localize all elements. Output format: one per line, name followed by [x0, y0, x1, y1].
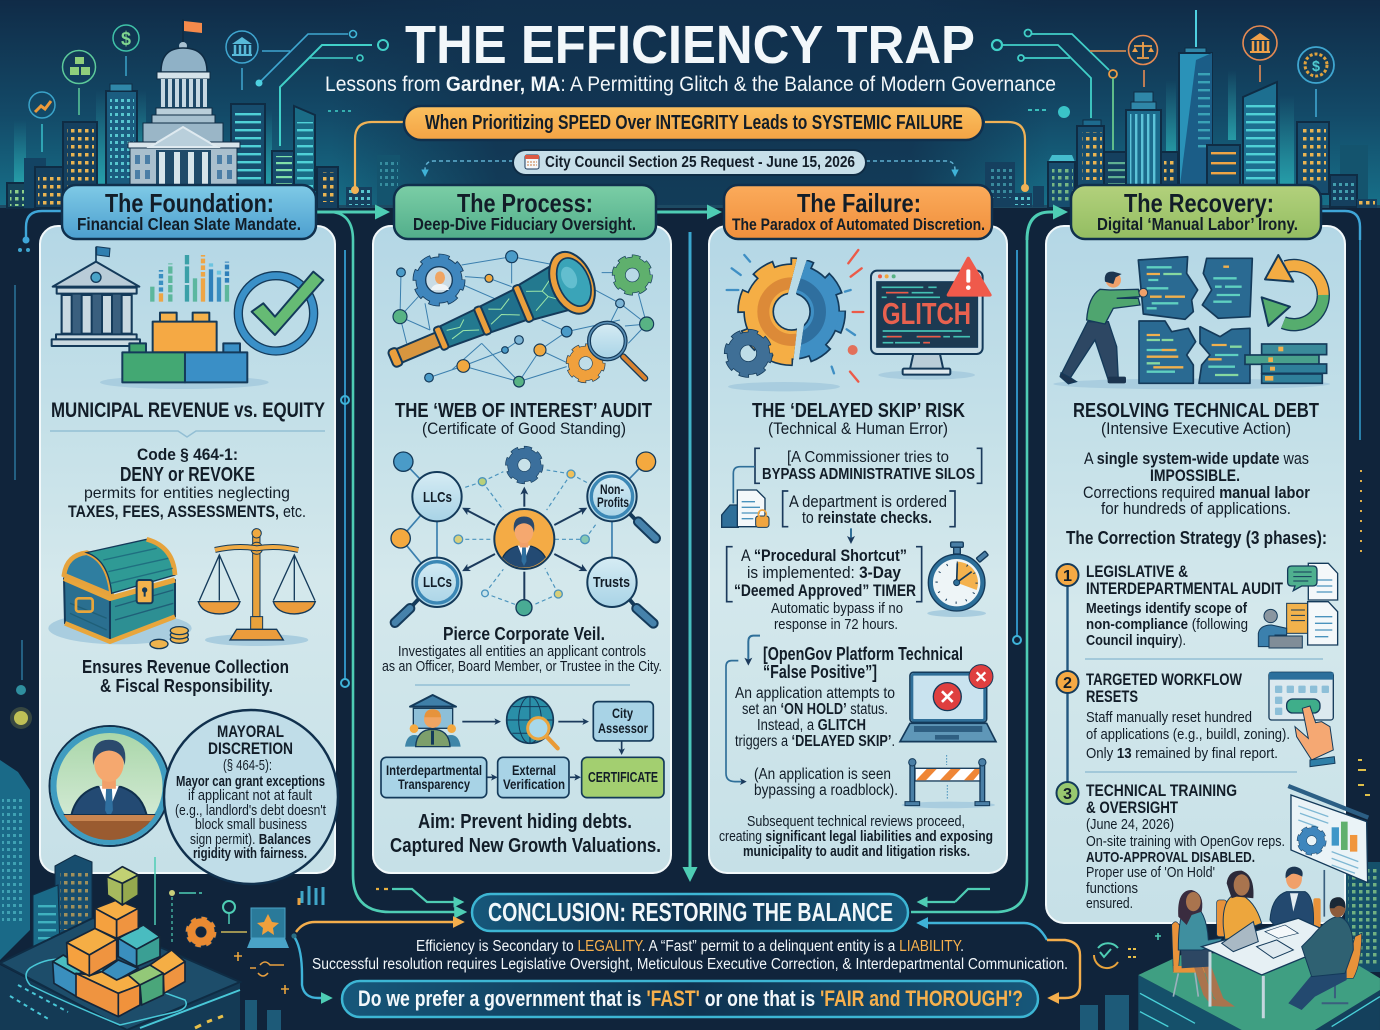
- text block: commissioner: [A Commissioner tries to: [787, 449, 949, 466]
- title: THE EFFICIENCY TRAP: [405, 15, 975, 75]
- banner: speed over integrity: When Prioritizing SPEED Over INTEGRITY Leads to SYSTEMIC FAILURE: [425, 112, 963, 134]
- woman with teal blouse: [1172, 890, 1235, 1007]
- timeline: phase markers: 2: [1063, 675, 1072, 692]
- divider chevron: [50, 431, 325, 437]
- label: certificate: CERTIFICATE: [588, 770, 658, 786]
- illustration: telescope network: [378, 245, 654, 389]
- header: the failure: The Paradox of Automated Discretion.: [732, 215, 985, 234]
- badge: city council date: [513, 150, 866, 175]
- banner: conclusion: CONCLUSION: RESTORING THE BALANCE: [488, 899, 893, 927]
- text block: phase 2: of applications (e.g., buildl, zoning).: [1086, 726, 1290, 743]
- header: the failure: [724, 185, 992, 239]
- icon: chart circle: [29, 92, 55, 152]
- heading: delayed skip risk: (Technical & Human Error): [768, 419, 948, 438]
- heading: municipal revenue: MUNICIPAL REVENUE vs. EQUITY: [51, 399, 325, 422]
- label: external verification: Verification: [503, 776, 565, 792]
- text block: phase 3: TECHNICAL TRAINING: [1086, 781, 1237, 800]
- text block: department: A department is ordered: [789, 493, 947, 511]
- text block: commissioner: BYPASS ADMINISTRATIVE SILOS: [762, 466, 975, 483]
- timeline: phase markers: [1056, 564, 1323, 804]
- icon: dollar circle: $: [121, 29, 131, 50]
- badge: city council date: City Council Section 25 Request - June 15, 2026: [545, 154, 855, 171]
- timeline: phase markers: 3: [1063, 786, 1072, 803]
- text block: phase 1: [1086, 562, 1283, 649]
- heading: delayed skip risk: THE ‘DELAYED SKIP’ RISK: [752, 399, 965, 422]
- label: trusts: Trusts: [593, 574, 630, 591]
- text block: code 464-1: permits for entities neglecting: [84, 485, 290, 502]
- header: the foundation: [62, 185, 316, 239]
- panel 2 card: [373, 226, 671, 873]
- text block: manual labor: IMPOSSIBLE.: [1150, 467, 1240, 485]
- man in navy suit: [1270, 867, 1321, 938]
- header: the process: [394, 185, 656, 239]
- text block: conclusion summary: [312, 938, 1068, 973]
- header: the recovery: The Recovery:: [1124, 188, 1274, 218]
- subtitle: Lessons from Gardner, MA: A Permitting Glitch & the Balance of Modern Governance: [325, 72, 1056, 96]
- panel: the foundation: [40, 185, 338, 884]
- panel 4 card: [1046, 226, 1345, 923]
- text block: procedural shortcut: A “Procedural Shortcut”: [741, 547, 907, 565]
- label: interdepartmental transparency: Interdepartmental: [386, 762, 482, 778]
- circuit lines: top right: [992, 30, 1126, 150]
- panel: the failure: [709, 185, 1007, 873]
- icon: bank circle: [226, 31, 258, 90]
- text block: department: [789, 493, 947, 527]
- connector lines to conclusion: [291, 889, 1080, 998]
- panel 1 card: [40, 226, 335, 873]
- skyline: right: [985, 10, 1377, 208]
- heading: technical debt: (Intensive Executive Action): [1101, 419, 1291, 438]
- text block: pierce corporate veil: as an Officer, Board Member, or Trustee in the City.: [382, 659, 662, 675]
- callout: mayoral discretion: sign permit). Balances: [190, 832, 311, 848]
- illustration: bottom-left isometric blocks: [0, 760, 323, 1030]
- text block: phase 3: functions: [1086, 880, 1138, 897]
- icon: scales circle: [1128, 36, 1158, 87]
- callout: mayoral discretion: if applicant not at fault: [188, 788, 312, 804]
- decor: right bottom icons: [1080, 933, 1161, 1030]
- text block: revenue collection: Ensures Revenue Collection: [82, 656, 289, 677]
- header: the process: The Process:: [457, 188, 593, 218]
- woman with orange sweater: [1217, 871, 1262, 943]
- text block: false positive: [735, 644, 963, 799]
- panel 3 card: [709, 226, 1007, 873]
- label: external verification: External: [512, 762, 556, 778]
- banner: closing question: [342, 981, 1038, 1017]
- capitol building: [128, 19, 240, 186]
- text block: procedural shortcut: [734, 547, 916, 633]
- text block: false positive: set an ‘ON HOLD’ status.: [742, 701, 888, 718]
- illustration: phase icons and meeting: [1138, 563, 1380, 1030]
- text block: manual labor: [1083, 450, 1310, 518]
- text block: false positive: (An application is seen: [754, 766, 891, 783]
- text block: false positive: Instead, a GLITCH: [757, 717, 866, 734]
- icon: dollar circle right: $: [1312, 58, 1321, 75]
- callout: mayoral discretion: (§ 464-5):: [223, 758, 272, 774]
- text block: phase 1: Meetings identify scope of: [1086, 600, 1248, 617]
- label: non-profits: Non-: [600, 482, 624, 497]
- text block: conclusion summary: Successful resolution requires Legislative Oversight, Meticulous Executive Correction, & Interdepartmental Communication.: [312, 956, 1068, 973]
- text block: phase 1: Council inquiry).: [1086, 632, 1186, 649]
- panel: the recovery: [1046, 185, 1380, 1030]
- text block: code 464-1: [68, 445, 306, 521]
- label: LLCs bottom: LLCs: [423, 574, 452, 591]
- text block: pierce corporate veil: [382, 623, 662, 675]
- text block: procedural shortcut: “Deemed Approved” TIMER: [734, 582, 916, 600]
- timeline: phase markers: 1: [1063, 568, 1072, 585]
- callout: mayoral discretion: (e.g., landlord's debt doesn't: [175, 803, 326, 819]
- diagram: pierce corporate veil hub: [391, 450, 656, 623]
- panel: the process: [373, 185, 671, 873]
- skyline: left with capitol: [7, 19, 400, 209]
- text block: legal liabilities: Subsequent technical reviews proceed,: [747, 814, 965, 830]
- flow graphics: brackets and icons: [722, 448, 996, 808]
- connector lines between panels: [15, 122, 1370, 912]
- flow diagram: certificate process: [381, 695, 664, 798]
- text block: conclusion summary: Efficiency is Secondary to LEGALITY. A “Fast” permit to a delinquent entity is a LIABILITY.: [416, 938, 964, 955]
- text block: phase 3: (June 24, 2026): [1086, 816, 1174, 833]
- meeting table: [1202, 918, 1347, 1018]
- text block: procedural shortcut: Automatic bypass if no: [771, 601, 903, 617]
- banner: closing question: Do we prefer a government that is 'FAST' or one that is 'FAIR and THOROUGH'?: [358, 986, 1023, 1011]
- side glow nodes: [10, 248, 32, 729]
- illustration: broken gear and glitch monitor: [727, 250, 990, 391]
- label: external verification: [503, 762, 565, 792]
- heading: correction strategy: The Correction Strategy (3 phases):: [1066, 527, 1327, 548]
- building: behind meeting scene: [1345, 862, 1380, 972]
- text block: false positive: An application attempts to: [735, 685, 895, 702]
- heading: web of interest audit: THE ‘WEB OF INTEREST’ AUDIT: [395, 399, 652, 422]
- text block: false positive: bypassing a roadblock).: [754, 782, 898, 799]
- icon: dollar circle: [113, 25, 139, 76]
- text block: false positive: “False Positive”]: [763, 662, 877, 682]
- text block: phase 2: RESETS: [1086, 687, 1138, 706]
- divider: [415, 684, 630, 686]
- heading: web of interest audit: [395, 399, 652, 438]
- text block: phase 2: Staff manually reset hundred: [1086, 709, 1252, 726]
- text block: phase 3: & OVERSIGHT: [1086, 798, 1178, 817]
- text block: phase 2: Only 13 remained by final report.: [1086, 745, 1278, 762]
- text block: phase 2: [1086, 670, 1290, 762]
- banner: conclusion: [472, 894, 908, 931]
- illustration: man pushing code blocks: [1053, 255, 1330, 389]
- text block: phase 3: Proper use of 'On Hold': [1086, 864, 1215, 881]
- circuit lines: top left: [256, 30, 388, 146]
- text block: phase 1: LEGISLATIVE &: [1086, 562, 1188, 581]
- text block: code 464-1: TAXES, FEES, ASSESSMENTS, etc.: [68, 503, 306, 521]
- icon: blocks circle: [62, 50, 96, 115]
- heading: technical debt: RESOLVING TECHNICAL DEBT: [1073, 399, 1319, 422]
- text block: false positive: triggers a ‘DELAYED SKIP’.: [735, 733, 895, 750]
- text block: commissioner: [762, 449, 975, 483]
- text block: department: to reinstate checks.: [802, 509, 932, 527]
- text block: legal liabilities: [719, 814, 993, 860]
- callout: mayoral discretion: MAYORAL: [217, 722, 284, 741]
- label: interdepartmental transparency: Transparency: [398, 776, 470, 792]
- text block: phase 2: TARGETED WORKFLOW: [1086, 670, 1243, 689]
- text block: aim: Captured New Growth Valuations.: [390, 835, 661, 857]
- text block: aim: [390, 811, 661, 857]
- banner: speed over integrity: [404, 106, 983, 140]
- label: LLCs top: LLCs: [423, 489, 452, 506]
- text block: manual labor: A single system-wide update was: [1084, 450, 1309, 468]
- text block: phase 3: ensured.: [1086, 895, 1133, 912]
- seated man on right: [1288, 897, 1362, 1010]
- text block: manual labor: Corrections required manual labor: [1083, 484, 1310, 502]
- text block: procedural shortcut: is implemented: 3-Day: [747, 564, 902, 582]
- portrait: mayor: [50, 726, 170, 846]
- header: the foundation: The Foundation:: [105, 188, 274, 218]
- header: the failure: The Failure:: [797, 188, 921, 218]
- callout: mayoral discretion: rigidity with fairness.: [193, 846, 307, 862]
- label: city assessor: Assessor: [598, 720, 648, 736]
- label: glitch: GLITCH: [882, 296, 971, 331]
- icon: calendar: [525, 155, 539, 169]
- text block: legal liabilities: municipality to audit and litigation risks.: [743, 844, 970, 860]
- text block: revenue collection: [82, 656, 289, 696]
- callout: mayoral discretion: [164, 710, 338, 884]
- label: non-profits: Profits: [597, 495, 629, 510]
- callout: mayoral discretion: Mayor can grant exceptions: [176, 774, 325, 790]
- text block: pierce corporate veil: Investigates all entities an applicant controls: [398, 644, 646, 660]
- text block: procedural shortcut: response in 72 hours.: [774, 617, 898, 633]
- text block: aim: Aim: Prevent hiding debts.: [418, 811, 632, 833]
- text block: phase 1: non-compliance (following: [1086, 616, 1248, 633]
- text block: legal liabilities: creating significant legal liabilities and exposing: [719, 829, 993, 845]
- illustration: bank, bars, blocks, check: [52, 247, 323, 389]
- icon: dollar circle right: [1298, 47, 1334, 117]
- label: city assessor: [598, 705, 648, 736]
- heading: delayed skip risk: [752, 399, 965, 438]
- decor: mini icons: [169, 886, 323, 1030]
- text block: revenue collection: & Fiscal Responsibility.: [100, 675, 273, 696]
- label: non-profits: [597, 482, 629, 510]
- header: the recovery: Digital ‘Manual Labor’ Irony.: [1097, 214, 1298, 234]
- heading: web of interest audit: (Certificate of Good Standing): [422, 419, 626, 438]
- header: the foundation: Financial Clean Slate Mandate.: [77, 214, 301, 234]
- label: interdepartmental transparency: [386, 762, 482, 792]
- text block: phase 3: On-site training with OpenGov reps.: [1086, 833, 1285, 850]
- callout: mayoral discretion: DISCRETION: [208, 739, 293, 758]
- text block: phase 1: INTERDEPARTMENTAL AUDIT: [1086, 579, 1283, 598]
- callout: mayoral discretion: block small business: [195, 817, 307, 833]
- label: city assessor: City: [612, 705, 633, 721]
- header: the process: Deep-Dive Fiduciary Oversight.: [413, 214, 636, 234]
- icon: bank circle right: [1243, 26, 1277, 82]
- text block: manual labor: for hundreds of applications.: [1101, 500, 1291, 518]
- heading: technical debt: [1073, 399, 1319, 438]
- header: the recovery: [1071, 185, 1321, 239]
- text block: phase 3: AUTO-APPROVAL DISABLED.: [1086, 849, 1255, 866]
- text block: pierce corporate veil: Pierce Corporate Veil.: [443, 623, 605, 644]
- text block: false positive: [OpenGov Platform Technical: [763, 644, 963, 664]
- text block: phase 3: [1086, 781, 1285, 912]
- text block: code 464-1: Code § 464-1:: [137, 445, 238, 464]
- illustration: treasure chest and scales: [48, 529, 315, 649]
- text block: code 464-1: DENY or REVOKE: [120, 464, 255, 486]
